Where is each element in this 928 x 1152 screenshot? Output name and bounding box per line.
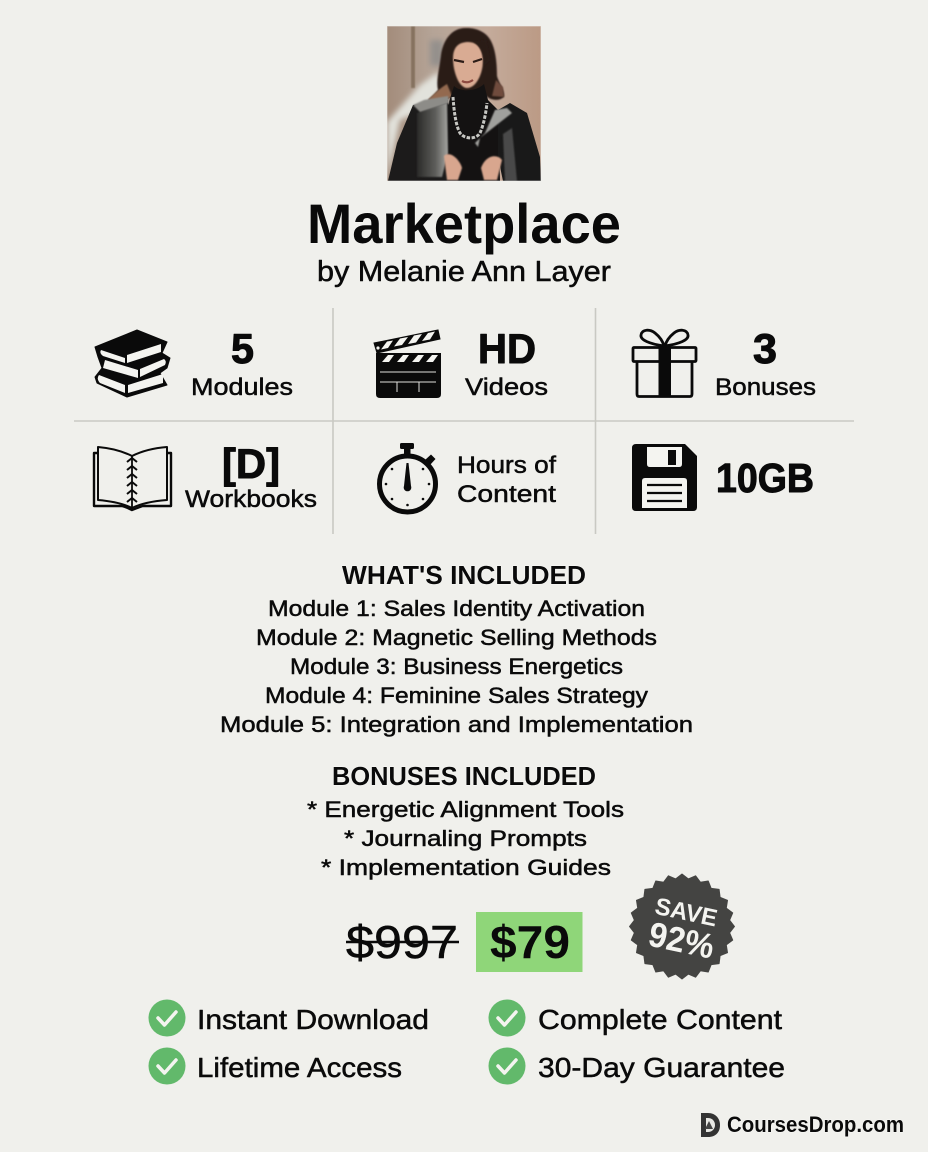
feature: 30-day guarantee: 30-Day Guarantee: [538, 1052, 785, 1083]
badge: save 92%: SAVE: [652, 893, 720, 932]
feature: instant download: [148, 1000, 429, 1036]
stats grid dividers: [74, 308, 854, 534]
stat: workbooks: [94, 440, 317, 513]
icon: stopwatch: [380, 443, 436, 512]
icon: gift box: [633, 330, 696, 397]
new price highlight: [476, 912, 582, 972]
stat label: Bonuses: [715, 374, 816, 401]
stat value: 5: [231, 325, 254, 372]
feature: instant download: Instant Download: [197, 1004, 429, 1035]
feature: lifetime access: [148, 1048, 402, 1084]
icon: stack of books: [95, 330, 170, 397]
feature: complete content: [488, 1000, 782, 1036]
feature: complete content: Complete Content: [538, 1004, 782, 1035]
new price: $79: [490, 916, 570, 968]
brand name: CoursesDrop.com: [727, 1112, 904, 1137]
module list: Module 3: Business Energetics: [290, 654, 623, 679]
icon: open spiral workbook: [94, 447, 171, 510]
feature: 30-day guarantee: [488, 1048, 785, 1084]
stat: HD videos: [374, 325, 548, 401]
section: what's included: [220, 560, 693, 737]
heading: WHAT'S INCLUDED: [342, 560, 586, 590]
stat: hours of content: [380, 443, 556, 512]
module list: Module 5: Integration and Implementation: [220, 712, 693, 737]
module list: Module 2: Magnetic Selling Methods: [256, 625, 657, 650]
stat value: 10GB: [716, 455, 814, 501]
hands: [444, 154, 462, 180]
face: [453, 42, 483, 88]
portrait photo: [387, 26, 541, 181]
feature: lifetime access: Lifetime Access: [197, 1052, 402, 1083]
module list: [220, 596, 693, 737]
title: Marketplace: [307, 192, 621, 255]
stat: 10GB: [632, 444, 814, 511]
coat right: [498, 103, 541, 181]
hair: [428, 28, 504, 102]
stat label line 2: Content: [457, 481, 556, 508]
chain: [453, 97, 487, 138]
badge: save 92%: [630, 874, 734, 979]
module list: Module 4: Feminine Sales Strategy: [265, 683, 649, 708]
icon: clapperboard: [374, 330, 441, 398]
stat label line 1: Hours of: [457, 452, 556, 479]
bonus list: * Implementation Guides: [321, 855, 611, 880]
stat value: [D]: [222, 440, 280, 487]
stat value: HD: [478, 325, 536, 372]
bonus list: * Energetic Alignment Tools: [307, 797, 624, 822]
badge: save 92%: 92%: [645, 915, 718, 967]
icon: floppy disk: [632, 444, 697, 511]
section: bonuses included: [307, 761, 624, 880]
bonus list: * Journaling Prompts: [344, 826, 587, 851]
coat left: [388, 100, 448, 181]
stat: 5 modules: [95, 325, 293, 401]
turtleneck: [446, 84, 500, 181]
stat value: 3: [753, 325, 777, 372]
stat: 3 bonuses: [633, 325, 816, 401]
old price: $997: [346, 916, 458, 968]
icon: D logo: [701, 1113, 720, 1137]
price block: [346, 912, 582, 972]
bonus list: [307, 797, 624, 880]
stat label: Workbooks: [185, 486, 317, 513]
brand logo: [701, 1112, 904, 1137]
stat label: Modules: [191, 374, 293, 401]
module list: Module 1: Sales Identity Activation: [268, 596, 645, 621]
subtitle: by Melanie Ann Layer: [317, 256, 611, 288]
stat label: Videos: [465, 374, 548, 401]
heading: BONUSES INCLUDED: [332, 761, 596, 791]
